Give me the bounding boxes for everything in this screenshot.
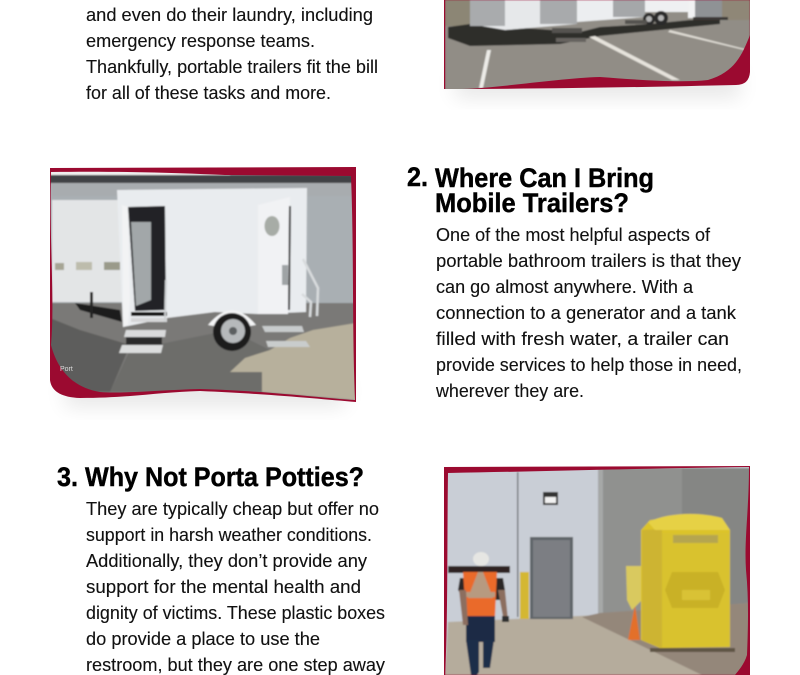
section 2: body text: One of the most helpful aspects of [436,225,711,245]
text block: intro paragraph ending: Thankfully, portable trailers fit the bill [86,57,378,77]
photo: parked restroom trailer [444,0,750,98]
porta potty [641,516,730,648]
section 2: body text: provide services to help those in need, [436,355,742,375]
section 2: body text: portable bathroom trailers is that they [436,251,741,271]
steps [131,312,167,316]
section 3: body text: do provide a place to use the [86,629,320,649]
photo: white mobile restroom trailer: Port [60,366,73,373]
section 3: body text: support for the mental health and [86,577,361,597]
trailer hitch [75,303,122,322]
section 2: body text: can go almost anywhere. With a [436,277,694,297]
section 3: body text: support in harsh weather conditions. [86,525,372,545]
section 2: heading [407,162,654,218]
section 2: heading: Where Can I Bring [435,163,654,193]
section 3: body text: They are typically cheap but offer no [86,499,379,519]
text block: intro paragraph ending: emergency response teams. [86,31,315,51]
section 3: heading: 3. [57,462,78,492]
section 3: body text [86,499,385,675]
text block: intro paragraph ending: and even do their laundry, including [86,5,373,25]
trailer body [117,188,307,327]
underframe [448,20,720,46]
photo: worker walking toward yellow porta potty [444,466,750,675]
section 3: heading: Why Not Porta Potties? [85,462,364,492]
section 2: body text: wherever they are. [435,381,584,401]
ground [50,303,356,400]
photo: white mobile restroom trailer [50,167,356,407]
section 2: heading: Mobile Trailers? [435,188,629,218]
caution cone [628,605,640,640]
section 3: body text: dignity of victims. These plastic boxes [86,603,385,623]
text block: intro paragraph ending: for all of these tasks and more. [86,83,331,103]
section 2: body text: filled with fresh water, a trailer can [436,329,729,349]
text block: intro paragraph ending [86,5,378,103]
section 2: body text: connection to a generator and a tank [436,303,737,323]
section 2: heading: 2. [407,162,428,192]
worker [458,578,505,600]
section 2: body text [435,225,742,401]
section 3: body text: Additionally, they don’t provide any [86,551,367,571]
section 3: body text: restroom, but they are one step away [86,655,385,675]
